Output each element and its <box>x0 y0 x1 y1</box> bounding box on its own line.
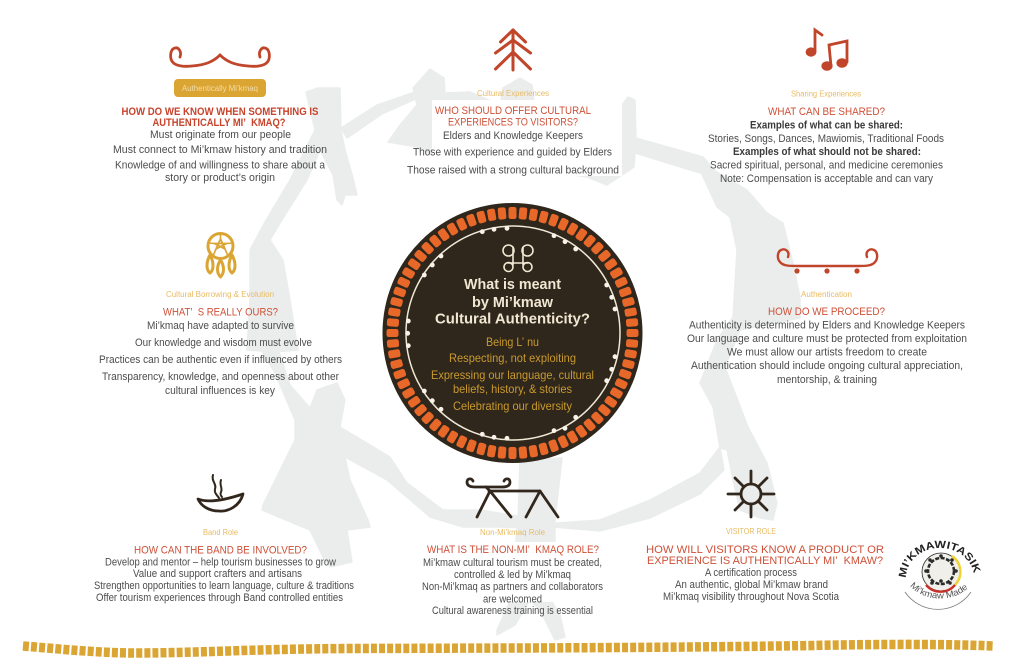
heading: WHAT CAN BE SHARED? <box>768 106 885 118</box>
medallion title: by Mi’kmaw <box>472 294 553 311</box>
medallion points: Expressing our language, cultural <box>431 369 594 382</box>
panel: authentication <box>687 249 967 386</box>
body text: Transparency, knowledge, and openness about other <box>102 371 339 383</box>
panel: authentically Mi'kmaq <box>113 48 327 184</box>
body text: Practices can be authentic even if influenced by others <box>99 354 342 366</box>
medallion points <box>431 336 594 413</box>
white dots <box>405 226 617 441</box>
heading: HOW WILL VISITORS KNOW A PRODUCT OR <box>646 544 884 556</box>
body text: Authenticity is determined by Elders and Knowledge Keepers <box>689 320 965 332</box>
body text: story or product’s origin <box>165 172 275 184</box>
panel: band role <box>94 475 354 604</box>
logo wordmark: MI’KMAWITASIK <box>898 540 981 578</box>
logo tagline: Mi’kmaw Made <box>910 582 967 598</box>
body text: Note: Compensation is acceptable and can vary <box>720 173 934 185</box>
center medallion <box>382 203 642 463</box>
body text <box>94 556 354 604</box>
body text: Those with experience and guided by Elders <box>413 146 612 158</box>
body text: Elders and Knowledge Keepers <box>443 130 583 142</box>
medallion title <box>435 276 590 328</box>
icon: curled bar with dots <box>778 249 877 274</box>
body text: Value and support crafters and artisans <box>133 568 302 580</box>
panel: visitor role <box>646 471 884 603</box>
heading: WHAT’ S REALLY OURS? <box>163 306 278 318</box>
body text: Stories, Songs, Dances, Mawiomis, Traditional Foods <box>708 133 944 145</box>
panel: cultural borrowing and evolution <box>99 233 342 397</box>
body text: mentorship, & training <box>777 374 877 386</box>
body text: Authentication should include ongoing cultural appreciation, <box>691 360 963 372</box>
body text: Must originate from our people <box>150 129 291 141</box>
heading: HOW DO WE KNOW WHEN SOMETHING IS <box>122 106 318 118</box>
logo underline arc <box>905 592 971 609</box>
heading <box>435 105 591 128</box>
body text: Offer tourism experiences through Band controlled entities <box>96 592 343 604</box>
body text <box>407 130 619 176</box>
body text: Cultural awareness training is essential <box>432 605 593 617</box>
body text: Must connect to Mi’kmaw history and tradition <box>113 144 327 156</box>
heading: WHO SHOULD OFFER CULTURAL <box>435 105 591 117</box>
body text: Examples of what should not be shared: <box>733 146 921 158</box>
body text <box>99 320 342 397</box>
badge <box>174 79 266 97</box>
label: Cultural Experiences <box>477 89 549 98</box>
label: Non-Mi’kmaq Role <box>480 528 545 537</box>
body text: Non-Mi’kmaq as partners and collaborators <box>422 581 603 593</box>
heading <box>646 544 884 567</box>
panel: cultural experiences <box>407 30 619 176</box>
body text: Develop and mentor – help tourism businesses to grow <box>105 556 336 568</box>
medallion points: Respecting, not exploiting <box>449 352 576 365</box>
heading <box>122 106 318 129</box>
body text: controlled & led by Mi’kmaq <box>454 569 571 581</box>
label: Band Role <box>203 528 238 537</box>
medallion points: beliefs, history, & stories <box>453 383 572 396</box>
body text: We must allow our artists freedom to create <box>727 346 927 358</box>
medallion title: Cultural Authenticity? <box>435 310 590 328</box>
body text: Mi’kmaq have adapted to survive <box>147 320 294 332</box>
body text: Mi’kmaq visibility throughout Nova Scotia <box>663 591 839 603</box>
body text: Mi’kmaw cultural tourism must be created, <box>423 557 602 569</box>
body text: An authentic, global Mi’kmaw brand <box>675 579 828 591</box>
heading: WHAT IS THE NON-MI’ KMAQ ROLE? <box>427 544 599 556</box>
body text: Examples of what can be shared: <box>750 120 903 132</box>
label: Cultural Borrowing & Evolution <box>166 290 274 299</box>
body text: Strengthen opportunities to learn language, culture & traditions <box>94 580 354 592</box>
panel: sharing experiences <box>708 30 944 185</box>
heading: AUTHENTICALLY MI’ KMAQ? <box>152 117 286 129</box>
body text: Our language and culture must be protected from exploitation <box>687 333 967 345</box>
icon: moustache curl <box>171 48 269 66</box>
cream inner ring <box>406 226 620 440</box>
medallion disc <box>382 203 642 463</box>
body text <box>708 120 944 185</box>
medallion points: Being L’ nu <box>486 336 539 349</box>
icon: music notes <box>806 30 848 71</box>
icon: sun <box>728 471 774 517</box>
body text: Knowledge of and willingness to share about a <box>115 160 325 172</box>
medallion title: What is meant <box>464 276 561 293</box>
body text <box>422 557 603 617</box>
icon: tree <box>496 30 530 70</box>
body text: A certification process <box>705 567 797 579</box>
label: Sharing Experiences <box>791 90 861 98</box>
heading: HOW CAN THE BAND BE INVOLVED? <box>134 544 307 556</box>
heading: EXPERIENCE IS AUTHENTICALLY MI’ KMAW? <box>647 555 883 567</box>
silhouette: ring of dancers <box>247 69 800 640</box>
body text: Those raised with a strong cultural background <box>407 164 619 176</box>
heading: EXPERIENCES TO VISITORS? <box>448 116 578 128</box>
icon: smudge bowl <box>198 475 243 511</box>
body text: Sacred spiritual, personal, and medicine ceremonies <box>710 160 943 172</box>
bead border <box>23 644 993 653</box>
body text: Our knowledge and wisdom must evolve <box>135 337 312 349</box>
orange bead ring <box>386 207 638 459</box>
body text <box>663 567 839 603</box>
icon: double-curl knot <box>503 245 533 272</box>
heading: HOW DO WE PROCEED? <box>768 306 885 318</box>
label: VISITOR ROLE <box>726 527 776 536</box>
body text: cultural influences is key <box>165 385 276 397</box>
body text: are welcomed <box>483 594 542 606</box>
panel: non-Mi'kmaq role <box>422 479 603 617</box>
logo emblem <box>922 553 960 592</box>
logo: Mi'kmawitasik <box>898 540 981 610</box>
icon: dreamcatcher <box>207 233 235 277</box>
icon: curled table frame <box>467 479 558 517</box>
medallion points: Celebrating our diversity <box>453 400 572 413</box>
badge: Authentically Mi’kmaq <box>182 84 258 93</box>
body text <box>687 320 967 386</box>
body text <box>113 129 327 184</box>
label: Authentication <box>801 290 852 299</box>
